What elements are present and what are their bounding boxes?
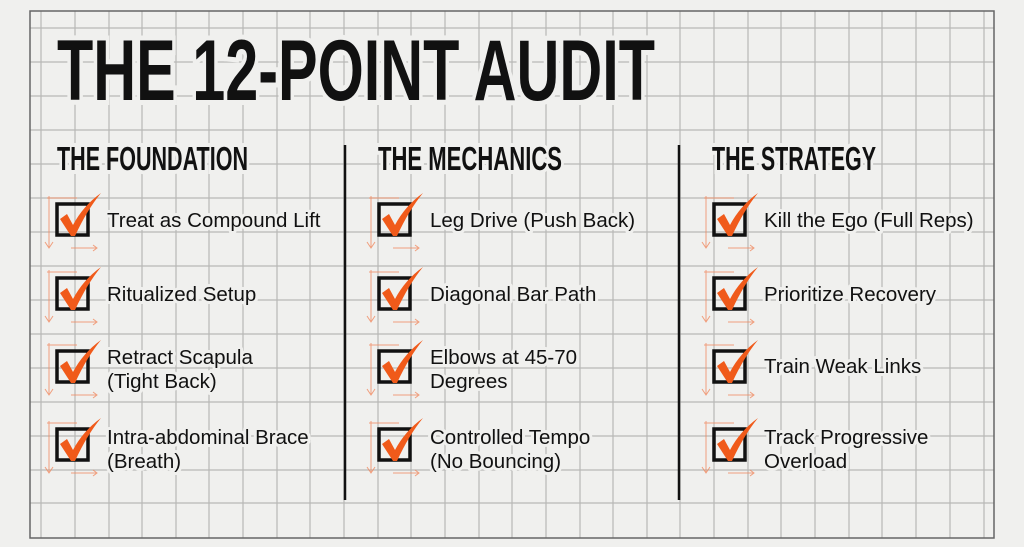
item 1 (367, 193, 635, 251)
item 1: Leg Drive (Push Back) (430, 209, 635, 232)
item 2: Diagonal Bar Path (430, 283, 596, 306)
panel: strategy (702, 140, 974, 476)
item 4: (Breath) (107, 450, 181, 473)
item 1 (702, 193, 974, 251)
item 4: Overload (764, 450, 847, 473)
item 3: Elbows at 45-70 (430, 346, 577, 369)
item 2: Prioritize Recovery (764, 283, 937, 306)
item 1 (45, 193, 321, 251)
item 3: (Tight Back) (107, 370, 217, 393)
item 4: Controlled Tempo (430, 426, 590, 449)
item 3: Retract Scapula (107, 346, 253, 369)
item 4: (No Bouncing) (430, 450, 561, 473)
heading: the mechanics: THE MECHANICS (378, 140, 562, 177)
item 1: Kill the Ego (Full Reps) (764, 209, 974, 232)
item 2 (45, 267, 256, 325)
panel: mechanics (367, 140, 635, 476)
title: THE 12-POINT AUDIT (57, 23, 655, 119)
item 4 (45, 418, 309, 476)
item 2 (702, 267, 937, 325)
item 4: Track Progressive (764, 426, 928, 449)
divider: right (678, 145, 680, 500)
panel: foundation (45, 140, 321, 476)
item 4 (702, 418, 928, 476)
item 3: Degrees (430, 370, 508, 393)
item 1: Treat as Compound Lift (107, 209, 321, 232)
item 3 (702, 340, 921, 398)
item 2: Ritualized Setup (107, 283, 256, 306)
item 2 (367, 267, 596, 325)
heading: the foundation: THE FOUNDATION (57, 140, 248, 177)
item 4 (367, 418, 590, 476)
item 3: Train Weak Links (764, 355, 921, 378)
item 3 (367, 340, 577, 398)
item 4: Intra-abdominal Brace (107, 426, 309, 449)
heading: the strategy: THE STRATEGY (712, 140, 876, 177)
divider: left (344, 145, 346, 500)
item 3 (45, 340, 253, 398)
